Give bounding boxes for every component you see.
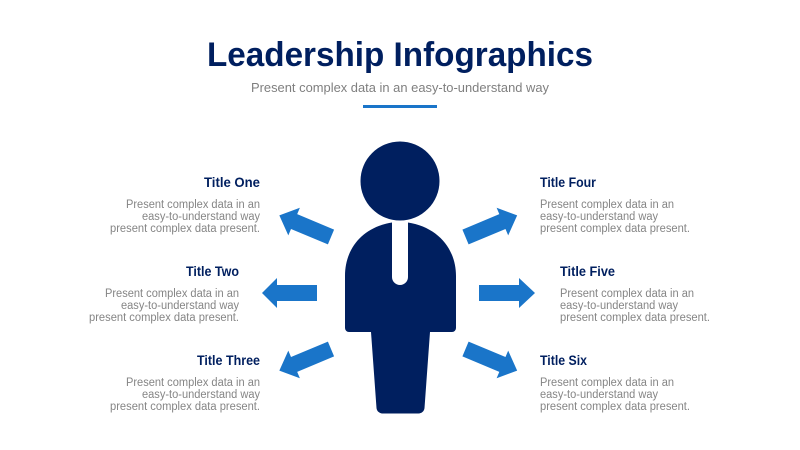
text block: title three: present complex data present. bbox=[110, 401, 260, 413]
text block: title six: easy-to-understand way bbox=[540, 389, 658, 401]
text block: title six: Present complex data in an bbox=[540, 377, 674, 389]
title: Leadership Infographics bbox=[207, 36, 593, 74]
text block: title two: present complex data present. bbox=[89, 312, 239, 324]
text block: title six: present complex data present. bbox=[540, 401, 690, 413]
text block: title two: Present complex data in an bbox=[105, 288, 239, 300]
text block: title four: present complex data present. bbox=[540, 223, 690, 235]
text block: title five bbox=[560, 263, 710, 324]
text block: title one: Title One bbox=[204, 174, 260, 190]
text block: title one: present complex data present. bbox=[110, 223, 260, 235]
arrow: to title five bbox=[479, 278, 535, 308]
text block: title four: Title Four bbox=[540, 174, 596, 190]
text block: title three: easy-to-understand way bbox=[142, 389, 260, 401]
text block: title one: Present complex data in an bbox=[126, 199, 260, 211]
text block: title four: Present complex data in an bbox=[540, 199, 674, 211]
arrow: to title three bbox=[274, 335, 337, 384]
text block: title three: Present complex data in an bbox=[126, 377, 260, 389]
text block: title two bbox=[89, 263, 239, 324]
text block: title five: Title Five bbox=[560, 263, 615, 279]
text block: title five: easy-to-understand way bbox=[560, 300, 678, 312]
text block: title one: easy-to-understand way bbox=[142, 211, 260, 223]
text block: title six: Title Six bbox=[540, 352, 587, 368]
text block: title two: easy-to-understand way bbox=[121, 300, 239, 312]
text block: title one bbox=[110, 174, 260, 235]
icon: leader figure bbox=[345, 142, 456, 414]
arrow: to title four bbox=[460, 202, 523, 251]
arrow: to title six bbox=[460, 335, 523, 384]
text block: title two: Title Two bbox=[186, 263, 239, 279]
text block: title five: Present complex data in an bbox=[560, 288, 694, 300]
arrow: to title two bbox=[262, 278, 317, 308]
text block: title four: easy-to-understand way bbox=[540, 211, 658, 223]
text block: title three: Title Three bbox=[197, 352, 260, 368]
text block: title five: present complex data present. bbox=[560, 312, 710, 324]
subtitle: Present complex data in an easy-to-understand way bbox=[251, 80, 549, 95]
text block: title six bbox=[540, 352, 690, 413]
title underline bbox=[363, 105, 437, 108]
arrow: to title one bbox=[274, 202, 337, 251]
text block: title four bbox=[540, 174, 690, 235]
text block: title three bbox=[110, 352, 260, 413]
